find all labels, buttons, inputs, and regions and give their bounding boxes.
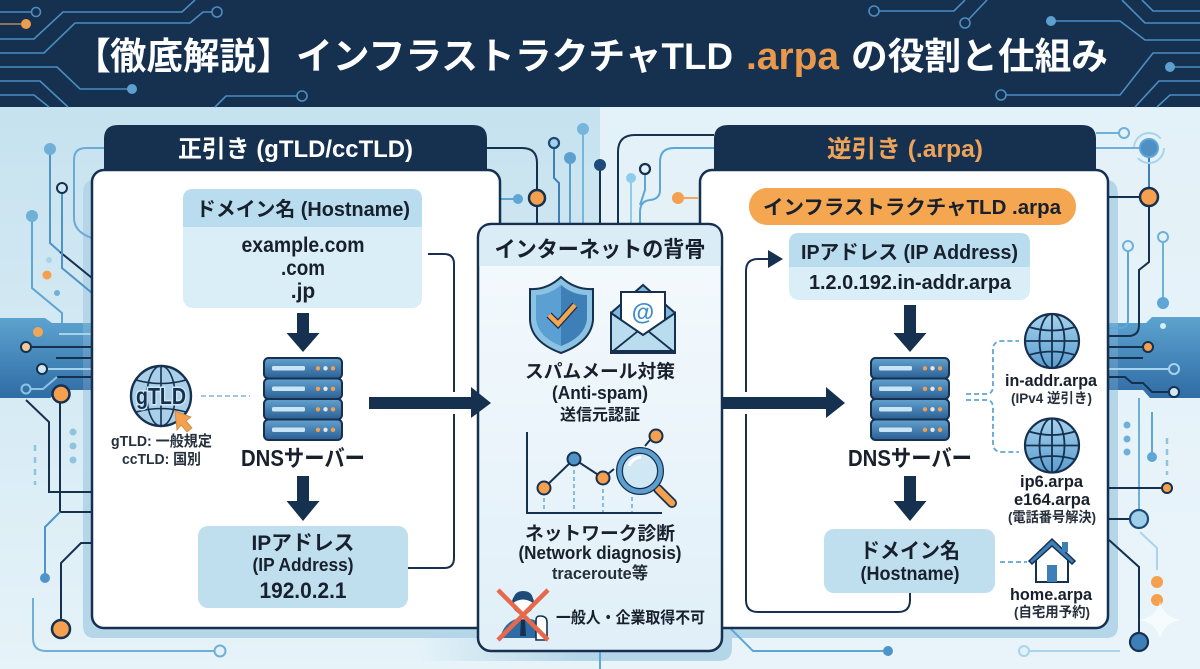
pill: infrastructure TLD — [749, 188, 1076, 225]
arrow: DNS to IP — [286, 476, 320, 521]
header bar — [0, 0, 1200, 107]
icon: globe in-addr — [1025, 314, 1079, 368]
title: 徹底解説 — [110, 36, 256, 77]
label: in-addr.arpa: (IPv4 逆引き) — [1011, 390, 1092, 406]
left circuit lines — [26, 143, 226, 656]
box: IP address — [198, 526, 408, 608]
dashed link: globe to DNS — [201, 395, 250, 397]
panel header: backbone — [479, 225, 721, 266]
label: anti-spam: スパムメール対策 — [525, 361, 675, 382]
note: gTLD and ccTLD: ccTLD: 国別 — [122, 451, 201, 468]
tab: reverse lookup — [714, 125, 1096, 190]
label: in-addr.arpa — [1005, 371, 1098, 406]
left circuit band — [0, 318, 92, 398]
icon: magnifier — [620, 450, 672, 503]
chart: network diagnosis — [527, 430, 662, 513]
label: DNS server: DNSサーバー — [241, 445, 365, 471]
panel body: forward lookup — [92, 170, 500, 628]
label: network diagnosis: traceroute等 — [552, 563, 648, 583]
icon: gTLD globe: gTLD — [136, 383, 186, 409]
header circuit left — [0, 0, 307, 107]
panel: internet backbone — [478, 224, 722, 651]
label: ip6 and e164: ip6.arpa — [1020, 472, 1084, 491]
right circuit lines — [600, 128, 1172, 669]
label: home.arpa — [1010, 585, 1093, 620]
icon: house — [1029, 539, 1075, 582]
note: gTLD and ccTLD — [111, 432, 212, 468]
icon: envelope — [611, 285, 675, 353]
icon: gTLD globe — [131, 366, 192, 432]
icon: envelope: @ — [632, 299, 654, 325]
header circuit right — [869, 0, 1200, 107]
title: 】 — [256, 36, 293, 77]
box: IP address arpa: IPアドレス (IP Address) — [801, 242, 1018, 264]
label: home.arpa: (自宅用予約) — [1014, 604, 1090, 620]
center top circuit lines — [487, 123, 714, 224]
tab: forward lookup — [104, 125, 487, 190]
box: domain name: example.com — [242, 234, 364, 257]
note: gTLD and ccTLD: gTLD: 一般規定 — [111, 432, 212, 450]
label: not available to public: 一般人・企業取得不可 — [556, 608, 705, 627]
box: IP address: (IP Address) — [252, 555, 354, 575]
label: ip6 and e164 — [1008, 472, 1096, 525]
title: .arpa — [746, 36, 840, 78]
connector: hostname back up to IP — [746, 250, 910, 612]
label: DNS server: DNSサーバー — [848, 445, 972, 471]
label: ip6 and e164: (電話番号解決) — [1008, 509, 1096, 525]
dashed link: hostname to home — [1000, 561, 1027, 563]
title — [74, 36, 1108, 78]
panel backing: forward lookup — [83, 180, 480, 638]
right circuit band — [1108, 317, 1200, 398]
tab label: forward lookup: 正引き (gTLD/ccTLD) — [178, 136, 413, 163]
icon: person crossed out — [498, 590, 548, 640]
box: IP address arpa — [789, 233, 1030, 300]
label: network diagnosis: ネットワーク診断 — [525, 523, 675, 544]
panel backing: backbone — [420, 628, 732, 661]
label: network diagnosis — [518, 523, 682, 583]
icon: DNS server — [264, 358, 342, 440]
connector: IP back up to domain — [408, 254, 454, 568]
label: anti-spam — [525, 361, 675, 424]
box: hostname: (Hostname) — [860, 564, 960, 585]
title: 【 — [74, 36, 111, 77]
arrow: left panel to center — [369, 387, 491, 418]
box: domain name: ドメイン名 (Hostname) — [196, 198, 410, 221]
box: hostname — [824, 529, 995, 593]
label: home.arpa: home.arpa — [1010, 585, 1093, 604]
pill: infrastructure TLD: インフラストラクチャTLD .arpa — [763, 196, 1062, 219]
box: hostname: ドメイン名 — [860, 540, 960, 563]
box: domain name: .jp — [291, 280, 315, 303]
arrow: IP to DNS — [894, 305, 926, 352]
arrow: center to right panel — [722, 387, 845, 418]
panel body: reverse lookup — [700, 170, 1108, 628]
arrow: DNS to hostname — [894, 476, 926, 521]
tab label: reverse lookup: 逆引き (.arpa) — [827, 136, 983, 163]
title: インフラストラクチャTLD — [296, 36, 733, 77]
box: domain name: .com — [281, 257, 325, 280]
icon: shield — [530, 277, 593, 353]
icon: DNS server — [871, 358, 949, 440]
label: in-addr.arpa: in-addr.arpa — [1005, 371, 1098, 390]
dashed links: DNS to arpa zones — [966, 341, 1019, 452]
box: domain name — [183, 189, 422, 308]
label: ip6 and e164: e164.arpa — [1014, 490, 1091, 509]
box: IP address: 192.0.2.1 — [260, 578, 346, 603]
panel backing: reverse lookup — [720, 180, 1118, 638]
arrow: domain to DNS — [286, 313, 320, 352]
box: IP address: IPアドレス — [252, 532, 354, 555]
panel: forward lookup — [92, 125, 500, 628]
box: IP address arpa: 1.2.0.192.in-addr.arpa — [809, 272, 1012, 294]
panel: reverse lookup — [700, 125, 1108, 628]
icon: globe ip6 — [1025, 418, 1079, 472]
panel body: backbone — [478, 224, 722, 651]
heading: backbone: インターネットの背骨 — [494, 237, 706, 262]
label: anti-spam: (Anti-spam) — [552, 383, 648, 403]
label: network diagnosis: (Network diagnosis) — [518, 543, 682, 563]
label: anti-spam: 送信元認証 — [560, 405, 640, 424]
title: の役割と仕組み — [851, 36, 1108, 77]
icon: sparkle — [1139, 601, 1181, 639]
